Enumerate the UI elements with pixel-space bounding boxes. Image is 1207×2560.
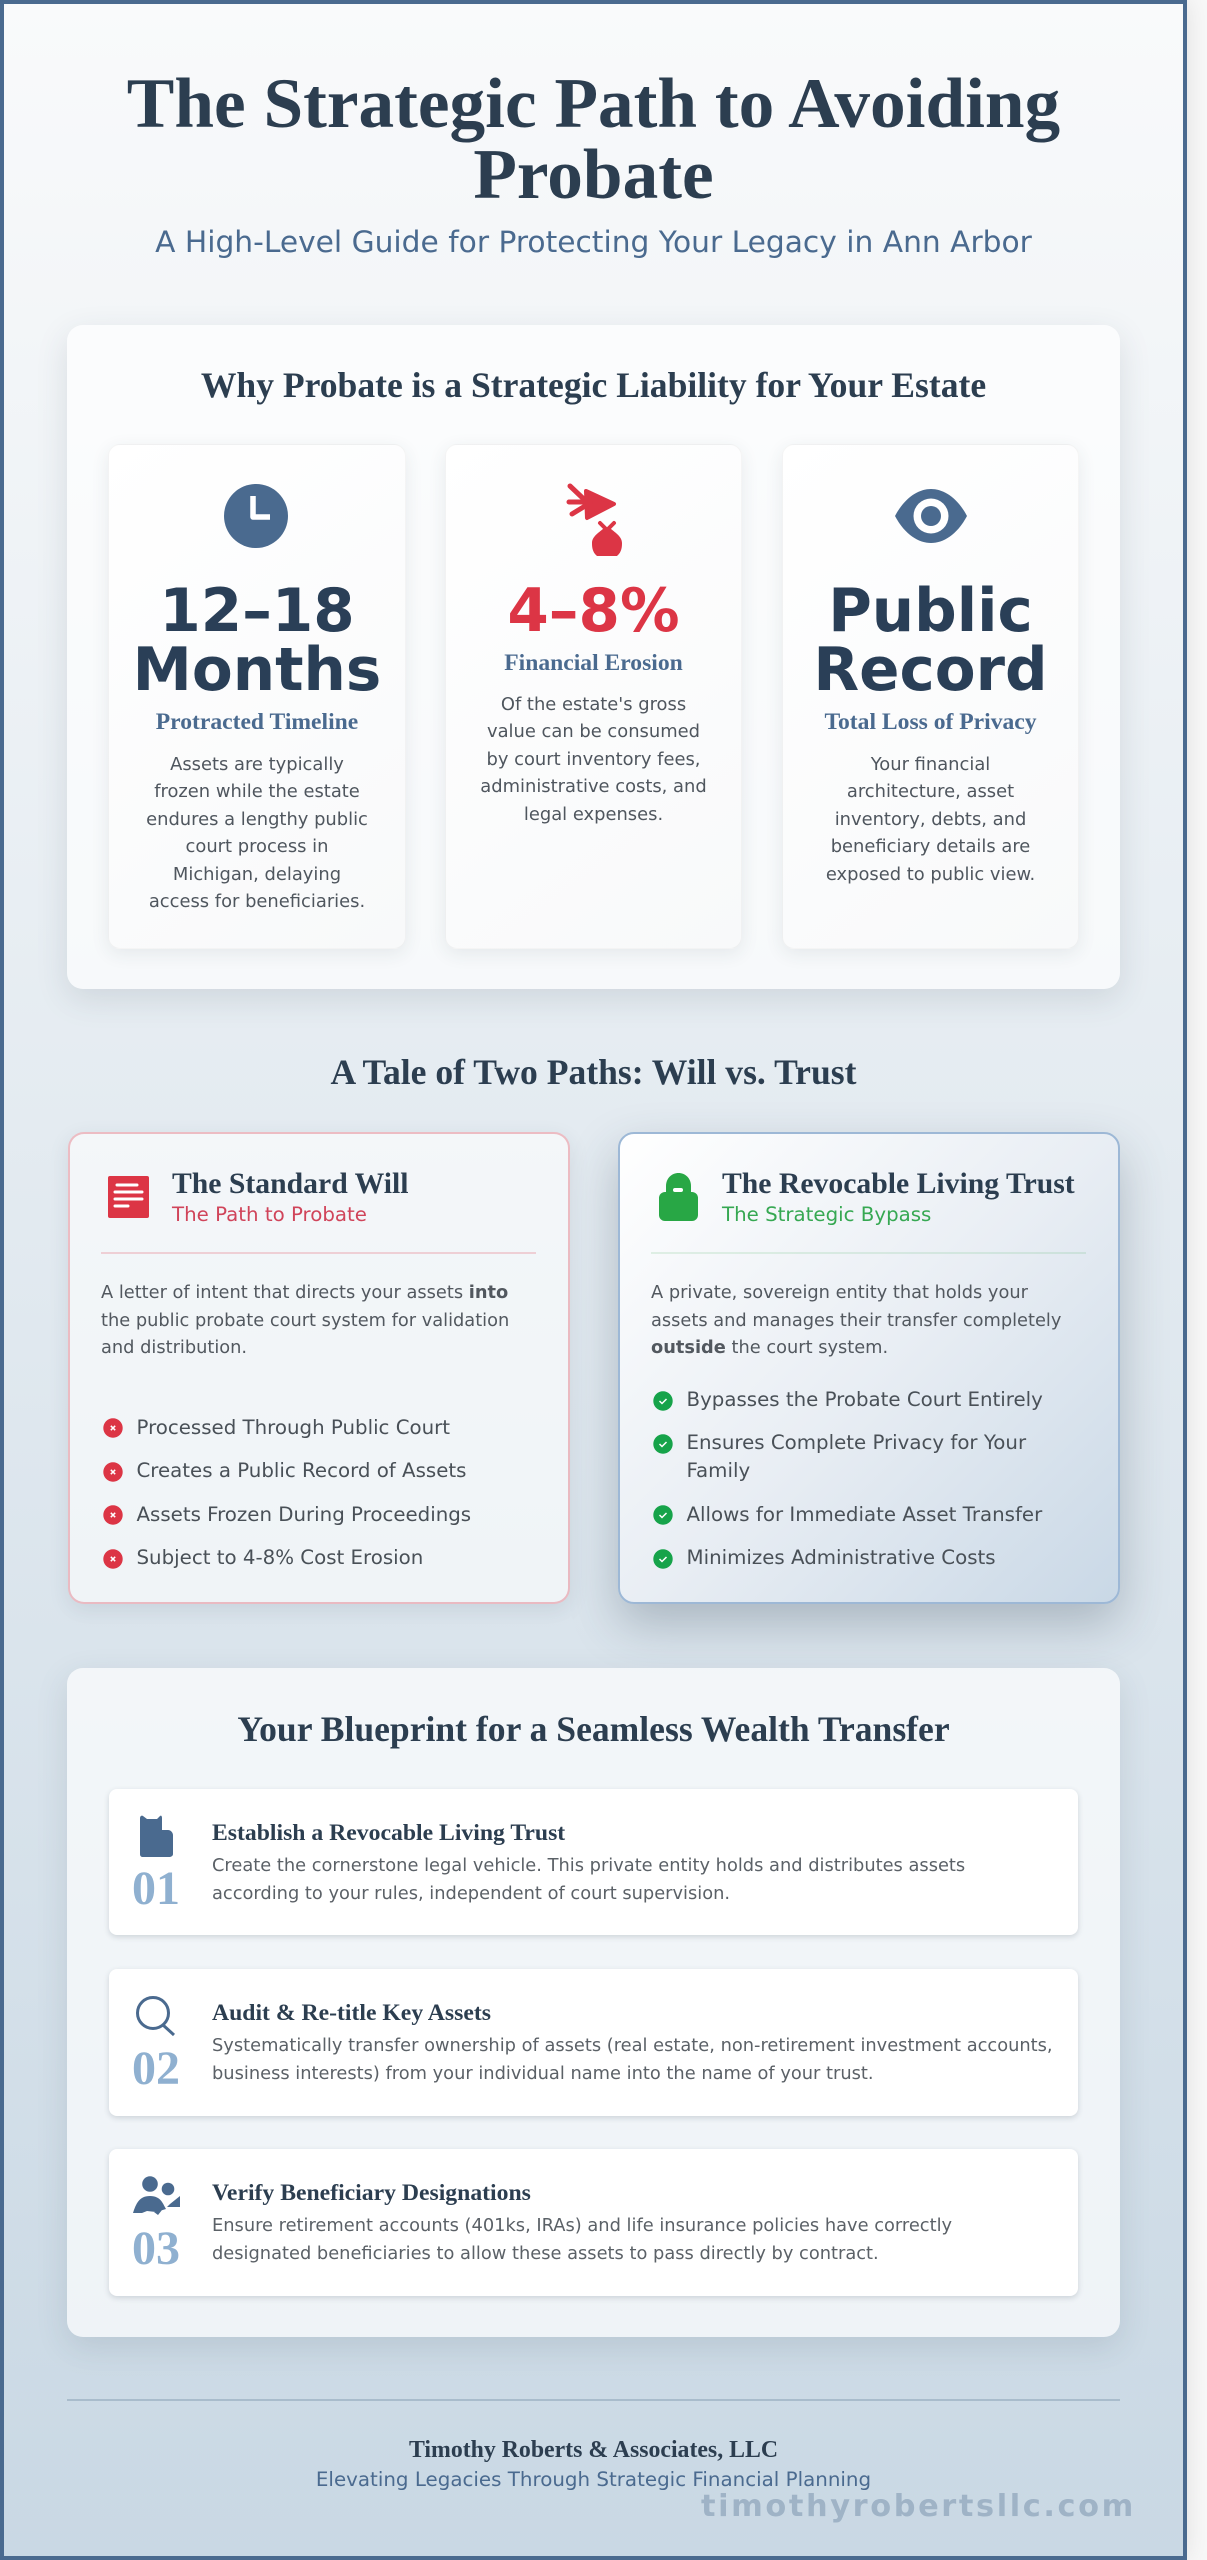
step 2 text: business interests) from your individual name into the name of your trust. [212,2062,874,2084]
step 3 card [109,2149,1078,2296]
text: erosion description: by court inventory fees, [487,748,700,770]
item: creates a public record: Creates a Public Record of Assets [136,1459,466,1482]
step 3 title: Verify Beneficiary Designations [212,2180,531,2206]
item: immediate transfer: Allows for Immediate Asset Transfer [686,1502,1042,1526]
text: timeline description: Assets are typically [170,754,344,774]
footer rule [67,2399,1120,2401]
text: erosion description: legal expenses. [524,804,663,824]
heading: blueprint: Your Blueprint for a Seamless Wealth Transfer [237,1709,950,1749]
text: will description: A letter of intent that directs your assets into [101,1282,508,1303]
card: timeline [108,444,406,949]
text: timeline description: court process in [186,836,328,857]
divider: trust [651,1252,1086,1254]
stat: 12-18 months: Months [133,636,381,704]
stat: public record [813,576,1048,704]
text: privacy description: Your financial [871,754,990,774]
title [127,64,1060,214]
step 3 text [212,2215,952,2264]
text: trust description: A private, sovereign entity that holds your [651,1282,1028,1303]
icon: clock [224,484,288,548]
step 1 text: according to your rules, independent of court supervision. [212,1882,730,1904]
step 3 text: Ensure retirement accounts (401ks, IRAs) and life insurance policies have correctly [212,2215,952,2236]
title: Probate [473,135,714,214]
icon: money bag and arrow [566,484,622,556]
heading: the standard will: The Standard Will [172,1168,408,1200]
stat: public record: Record [813,636,1048,704]
icon: document [108,1176,149,1218]
subheading: strategic bypass: The Strategic Bypass [722,1203,931,1226]
step 2 text: Systematically transfer ownership of assets (real estate, non-retirement investment accounts, [212,2035,1053,2056]
list: will drawbacks [103,1416,471,1569]
panel: why probate is a liability [67,325,1120,989]
title: The Strategic Path to Avoiding [127,64,1060,143]
item: minimizes costs: Minimizes Administrative Costs [686,1546,996,1569]
text: privacy description: architecture, asset [847,781,1014,802]
subtitle: A High-Level Guide for Protecting Your Legacy in Ann Arbor [155,225,1032,260]
text: timeline description [146,754,368,912]
number 01: 01 [132,1862,180,1915]
card: public record [782,444,1079,949]
text: timeline description: frozen while the estate [154,781,360,802]
heading: revocable living trust: The Revocable Living Trust [722,1168,1075,1200]
panel: blueprint [67,1668,1120,2337]
text: will description [101,1282,509,1358]
stat: public record: Public [828,576,1033,646]
label: financial erosion: Financial Erosion [504,650,683,676]
label: protracted timeline: Protracted Timeline [156,709,358,735]
icon: document folder [140,1816,173,1857]
label: total loss of privacy: Total Loss of Privacy [824,709,1037,735]
icons: green checks [653,1391,673,1569]
divider: will [101,1252,536,1254]
item: ensures privacy: Ensures Complete Privacy for Your [686,1431,1026,1454]
item: processed through public court: Processed Through Public Court [136,1416,450,1438]
text: timeline description: access for beneficiaries. [149,891,365,912]
text: trust description: assets and manages their transfer completely [651,1310,1061,1331]
text: will description: the public probate court system for validation [101,1310,509,1331]
item: cost erosion: Subject to 4-8% Cost Erosion [136,1546,423,1569]
watermark: website: timothyrobertsllc.com [701,2489,1136,2524]
icon: people [133,2176,180,2215]
icon: magnifier [136,1996,175,2036]
item: assets frozen: Assets Frozen During Proceedings [136,1502,471,1526]
footer: firm name: Timothy Roberts & Associates, LLC [409,2437,778,2463]
step 3 text: designated beneficiaries to allow these assets to pass directly by contract. [212,2242,879,2264]
step 1 title: Establish a Revocable Living Trust [212,1820,565,1846]
text: erosion description: administrative costs, and [480,776,707,797]
step 2 text [212,2035,1053,2084]
text: privacy description [826,754,1035,884]
stat: 4-8 percent: 4–8% [507,576,680,646]
stat: 12-18 months: 12–18 [159,576,355,646]
text: privacy description: beneficiary details are [831,836,1030,857]
text: trust description: outside the court system. [651,1337,888,1358]
text: erosion description: value can be consumed [487,721,700,742]
card: financial erosion [445,444,742,949]
heading: why probate: Why Probate is a Strategic Liability for Your Estate [201,365,986,405]
step 2 title: Audit & Re-title Key Assets [212,2000,491,2026]
icon: lock [659,1173,698,1221]
item: ensures privacy [686,1431,1026,1482]
text: trust description [651,1282,1061,1358]
step 1 card [109,1789,1078,1935]
step 1 text [212,1855,965,1904]
subheading: path to probate: The Path to Probate [172,1203,367,1226]
text: will description: and distribution. [101,1337,247,1358]
panel: the standard will [68,1132,570,1604]
icons: red crosses [103,1418,123,1569]
list: trust benefits [653,1388,1043,1569]
footer: tagline: Elevating Legacies Through Strategic Financial Planning [316,2468,871,2491]
text: timeline description: Michigan, delaying [173,864,341,884]
panel: revocable living trust [618,1132,1120,1604]
heading: tale of two paths: A Tale of Two Paths: Will vs. Trust [331,1052,856,1092]
step 2 card [109,1969,1078,2116]
text: erosion description [480,694,707,824]
text: timeline description: endures a lengthy public [146,808,368,830]
text: erosion description: Of the estate's gross [501,694,686,714]
item: ensures privacy: Family [686,1459,750,1482]
stat: 12-18 months [133,576,381,704]
text: privacy description: exposed to public view. [826,864,1035,884]
number 02: 02 [132,2042,180,2095]
item: bypasses probate: Bypasses the Probate Court Entirely [686,1388,1043,1410]
text: privacy description: inventory, debts, and [835,808,1026,830]
icon: eye [895,489,967,543]
step 1 text: Create the cornerstone legal vehicle. This private entity holds and distributes assets [212,1855,965,1876]
number 03: 03 [132,2222,180,2275]
